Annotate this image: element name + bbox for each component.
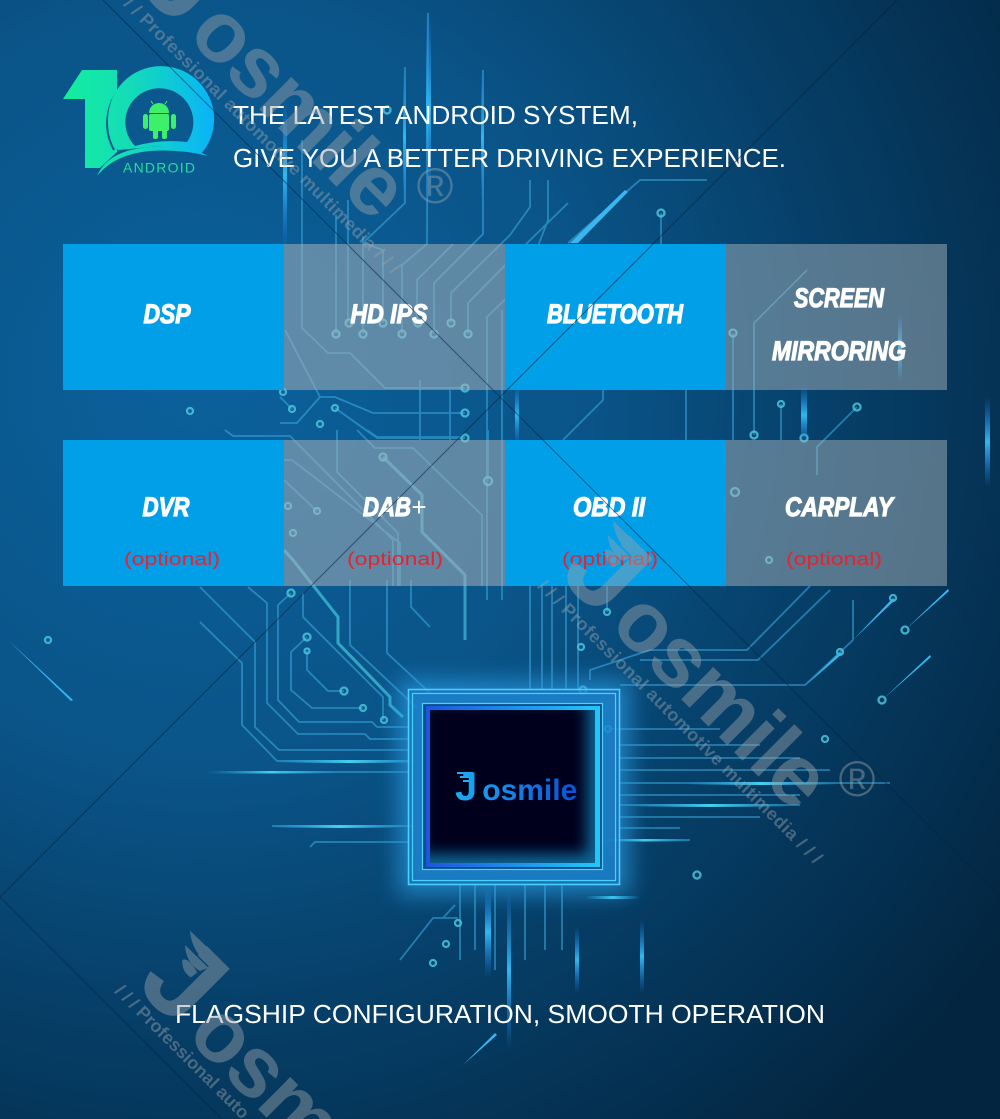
- circuit node dots: [45, 106, 908, 966]
- panel: feature row 1: MIRRORING: [772, 336, 906, 366]
- panel: feature row 1: SCREEN: [794, 283, 884, 313]
- icon: android robot: [143, 101, 176, 139]
- thick teal trace: [284, 550, 403, 717]
- panel: feature row 1: BLUETOOTH: [547, 299, 683, 329]
- watermark: top: ®: [417, 158, 454, 214]
- chip: processor with Josmile logo: [398, 680, 630, 895]
- heading: top: GIVE YOU A BETTER DRIVING EXPERIENCE.: [233, 145, 786, 173]
- digit zero ring: [108, 66, 214, 154]
- digit one: [63, 70, 117, 168]
- icon: Android 10 logo: [63, 66, 214, 176]
- panel: feature row 2: [63, 440, 947, 586]
- panel: feature row 1: DSP: [144, 299, 191, 329]
- panel: feature row 2: DAB: [363, 492, 411, 522]
- heading: bottom caption: FLAGSHIP CONFIGURATION, SMOOTH OPERATION: [175, 1001, 825, 1029]
- watermark: middle: Josmile: [539, 502, 868, 830]
- panel: feature row 2: (optional): [786, 548, 882, 569]
- heading: top: THE LATEST ANDROID SYSTEM,: [233, 102, 638, 130]
- chip logo text: Josmile: [455, 765, 577, 809]
- panel: feature row 2: +: [411, 492, 427, 522]
- panel: feature row 2: (optional): [124, 548, 220, 569]
- ring outline gap: [107, 86, 122, 150]
- panel: feature row 2: CARPLAY: [785, 492, 896, 522]
- panel: feature row 2: (optional): [347, 548, 443, 569]
- swoosh: [97, 146, 208, 176]
- watermark: bottom: / / / Professional auto: [111, 981, 253, 1119]
- logo label: ANDROID: [123, 160, 195, 176]
- panel: feature row 2: (optional): [562, 548, 658, 569]
- watermark: middle: / / / Professional automotive multimedia / / /: [534, 576, 826, 868]
- heading: top: [233, 102, 786, 173]
- circuit board traces: [200, 13, 890, 970]
- panel: feature row 1: [63, 244, 947, 390]
- chip logo wing lines: [457, 772, 473, 782]
- panel: feature row 1: HD IPS: [350, 299, 428, 329]
- thick trace through panel: [383, 457, 465, 640]
- panel: feature row 2: DVR: [142, 492, 190, 522]
- panel: feature row 2: OBD II: [573, 492, 645, 522]
- watermark: middle: ®: [839, 751, 876, 807]
